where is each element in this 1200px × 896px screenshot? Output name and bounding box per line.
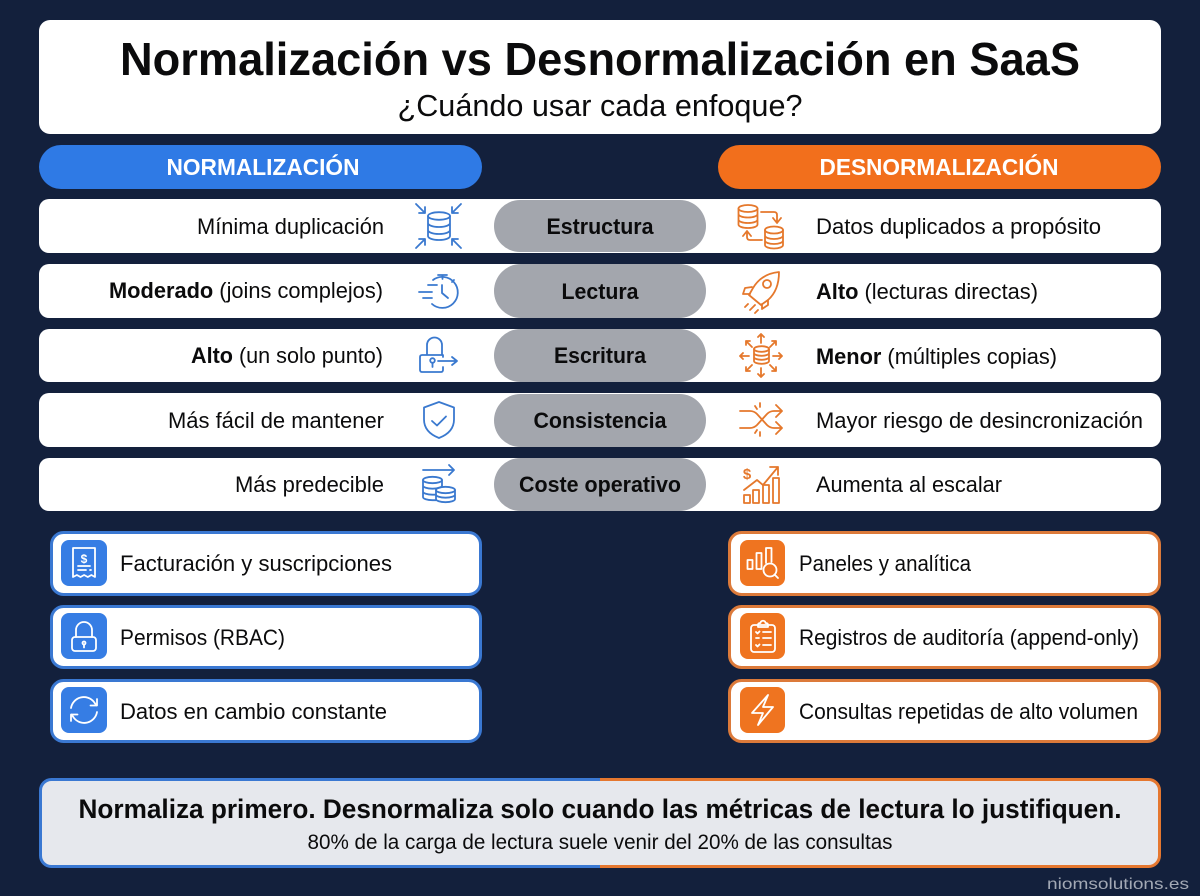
card: paneles: Paneles y analítica [799, 551, 972, 576]
pill: coste operativo [494, 458, 706, 511]
card: registros: Registros de auditoría (append-only) [799, 625, 1139, 650]
row: lectura: Alto (lecturas directas) [816, 279, 1038, 304]
card: consultas: Consultas repetidas de alto volumen [799, 699, 1138, 724]
icon: compressed database [416, 204, 461, 248]
row: escritura: Alto (un solo punto) [191, 343, 383, 368]
icon: database with radiating arrows [740, 334, 782, 377]
row: consistencia: Mayor riesgo de desincronización [816, 408, 1143, 433]
pill: coste operativo: Coste operativo [519, 472, 681, 497]
pill: escritura [494, 329, 706, 382]
icon: receipt [61, 540, 107, 586]
icon label: dollar: $ [81, 552, 88, 566]
icon: stopwatch [419, 275, 458, 308]
pill: escritura: Escritura [554, 343, 647, 368]
pill: lectura [494, 264, 706, 318]
row: coste operativo: Más predecible [235, 472, 384, 497]
icon: lightning bolt [740, 687, 785, 733]
icon: synced databases [738, 205, 783, 248]
row: consistencia: Más fácil de mantener [168, 408, 384, 433]
icon: lock with arrow [420, 338, 457, 372]
pill: estructura: Estructura [546, 214, 654, 239]
card: facturación: Facturación y suscripciones [120, 551, 392, 576]
column header: desnormalización [718, 145, 1161, 189]
card: permisos: Permisos (RBAC) [120, 625, 285, 650]
subtitle: ¿Cuándo usar cada enfoque? [398, 88, 802, 123]
icon label: dollar sign: $ [743, 466, 752, 483]
icon: clipboard [740, 613, 785, 659]
row: escritura: Menor (múltiples copias) [816, 344, 1057, 369]
row: consistencia [39, 393, 1161, 447]
card: datos en cambio [52, 680, 480, 742]
column header: desnormalización: DESNORMALIZACIÓN [820, 153, 1058, 180]
row: lectura [39, 264, 1161, 318]
row: coste operativo [39, 458, 1161, 511]
row: estructura: Datos duplicados a propósito [816, 214, 1101, 239]
row: estructura [39, 199, 1161, 253]
icon: refresh [61, 687, 107, 733]
row: coste operativo: Aumenta al escalar [816, 472, 1002, 497]
card: facturación [52, 532, 480, 594]
row: lectura: Moderado (joins complejos) [109, 278, 383, 303]
icon: coins with arrow [423, 465, 455, 502]
pill: lectura: Lectura [562, 279, 639, 304]
pill: consistencia [494, 394, 706, 447]
icon: rocket [743, 272, 779, 313]
column header: normalización: NORMALIZACIÓN [166, 153, 360, 180]
column header: normalización [39, 145, 482, 189]
icon: shield with check [424, 402, 454, 438]
title panel [39, 20, 1161, 134]
callout: conclusión: 80% de la carga de lectura suele venir del 20% de las consultas [308, 831, 892, 854]
card: registros [730, 606, 1160, 668]
icon: crossing arrows [740, 403, 782, 436]
card: consultas [730, 680, 1160, 742]
row: estructura: Mínima duplicación [197, 214, 384, 239]
pill: consistencia: Consistencia [534, 408, 667, 433]
callout: conclusión: Normaliza primero. Desnormaliza solo cuando las métricas de lectura lo justifiquen. [78, 794, 1122, 824]
row: escritura [39, 329, 1161, 382]
card: datos en cambio: Datos en cambio constante [120, 699, 387, 724]
card: paneles [730, 532, 1160, 594]
title: Normalización vs Desnormalización en SaaS [120, 33, 1080, 85]
pill: estructura [494, 200, 706, 252]
card: permisos [52, 606, 480, 668]
icon: chart with magnifier [740, 540, 785, 586]
icon: chart with rising arrow [744, 467, 779, 503]
icon: padlock [61, 613, 107, 659]
callout: conclusión [40, 780, 1160, 866]
watermark: niomsolutions.es [1047, 876, 1189, 893]
